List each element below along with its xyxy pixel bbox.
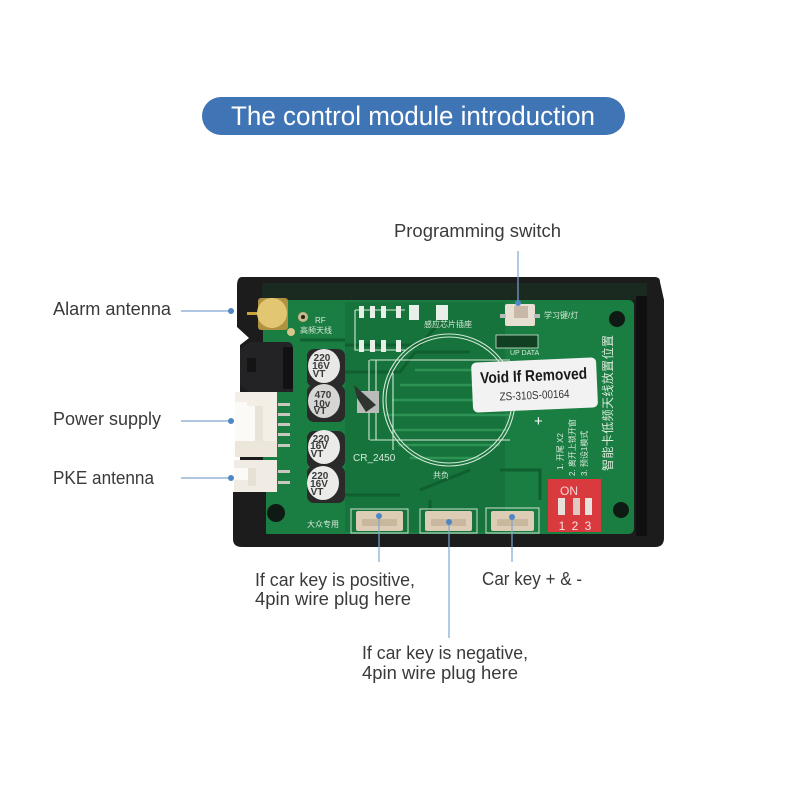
antenna hole and label: RF <box>315 316 326 325</box>
board markings: UP DATA <box>510 350 540 357</box>
label: positive plug: 4pin wire plug here <box>255 589 411 609</box>
label: negative plug: If car key is negative, <box>362 643 528 663</box>
capacitors: 10v <box>314 399 331 410</box>
board markings: 共负 <box>433 470 449 480</box>
antenna hole and label <box>298 312 332 335</box>
white power supply connector <box>235 392 290 457</box>
vertical board text: 1. 开尾 X2 <box>556 433 565 470</box>
white board connectors <box>351 508 539 533</box>
label: car key plus and minus: Car key + & - <box>482 569 582 589</box>
red DIP switch: 1 <box>559 519 566 533</box>
label: alarm antenna: Alarm antenna <box>53 299 172 319</box>
capacitors: VT <box>311 487 323 498</box>
leader: alarm antenna <box>181 308 234 314</box>
void sticker <box>471 357 598 413</box>
leader: car key <box>509 514 515 562</box>
white PKE connector <box>234 460 290 492</box>
label: programming switch: Programming switch <box>394 221 561 241</box>
circuit traces <box>300 305 540 520</box>
capacitors <box>307 349 345 503</box>
board markings: 学习键/灯 <box>544 310 578 320</box>
vertical board text: 3. 预设1模式 <box>579 431 589 476</box>
vertical board text: 智能卡低频天线放置位置 <box>600 335 615 471</box>
control module photo <box>233 277 664 547</box>
void sticker: Void If Removed <box>480 366 587 387</box>
label: positive plug <box>255 570 415 609</box>
red DIP switch <box>548 479 601 533</box>
leader: power supply <box>181 418 234 424</box>
capacitors: 470 <box>315 390 332 401</box>
capacitors: 16V <box>310 479 328 490</box>
capacitors: VT <box>314 406 326 417</box>
vertical board text <box>556 335 615 476</box>
vertical board text: 2. 离开上锁开窗 <box>567 419 577 476</box>
board markings: 大众专用 <box>307 519 339 529</box>
antenna hole and label: 高频天线 <box>300 325 332 335</box>
leader: negative plug <box>446 519 452 638</box>
black power connector <box>240 342 293 392</box>
capacitors: VT <box>311 449 323 460</box>
capacitors: VT <box>313 369 325 380</box>
leader: positive plug <box>376 513 382 562</box>
capacitors: 220 <box>312 471 329 482</box>
capacitors: 220 <box>314 353 331 364</box>
red DIP switch: 3 <box>585 519 592 533</box>
label: positive plug: If car key is positive, <box>255 570 415 590</box>
green circuit board <box>263 300 634 534</box>
screw holes <box>267 311 629 522</box>
board markings: + <box>534 413 543 430</box>
red DIP switch: 2 <box>572 519 579 533</box>
title banner: The control module introduction <box>231 101 595 131</box>
label: PKE antenna: PKE antenna <box>53 468 155 488</box>
label: negative plug: 4pin wire plug here <box>362 663 518 683</box>
board markings <box>307 310 578 529</box>
capacitors: 16V <box>312 361 330 372</box>
gold antenna socket <box>247 298 295 336</box>
board markings: 感应芯片插座 <box>424 319 472 329</box>
capacitors: 16V <box>310 441 328 452</box>
black case <box>233 277 664 547</box>
label: negative plug <box>362 643 528 683</box>
leader: programming switch <box>515 251 521 306</box>
capacitors: 220 <box>313 434 330 445</box>
leader: PKE antenna <box>181 475 234 481</box>
void sticker: ZS-310S-00164 <box>499 388 570 404</box>
label: power supply: Power supply <box>53 409 161 429</box>
CR_2450 label: CR_2450 <box>353 453 396 464</box>
red DIP switch: ON <box>560 484 578 498</box>
programming switch <box>500 304 540 326</box>
IC chip <box>354 385 379 413</box>
